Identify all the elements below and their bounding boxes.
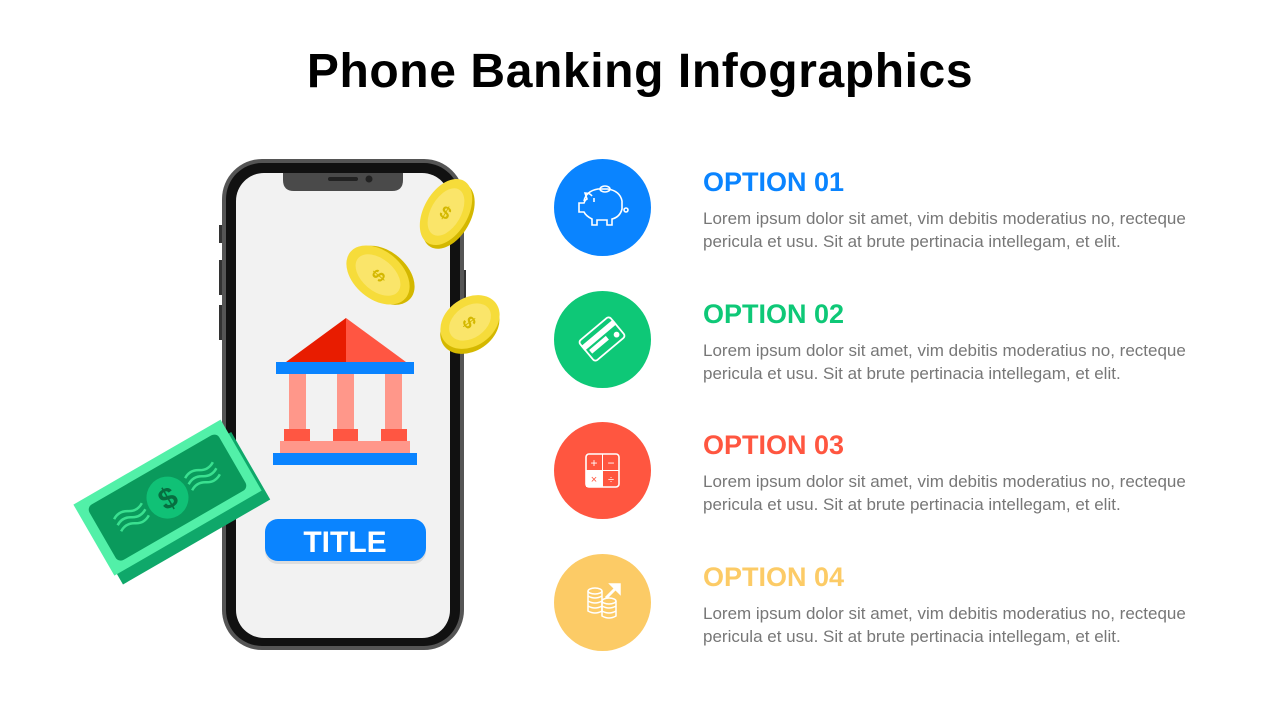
title button bbox=[265, 519, 426, 564]
title button: TITLE bbox=[303, 526, 387, 559]
option 04 text: pericula et usu. Sit at brute pertinacia intellegam, et elit. bbox=[703, 627, 1121, 646]
icon circle: calculator: − bbox=[607, 456, 615, 470]
coins: $ bbox=[458, 313, 480, 332]
icon circle: calculator: ÷ bbox=[608, 474, 614, 486]
option 02 text bbox=[703, 299, 1186, 383]
option 01 text: pericula et usu. Sit at brute pertinacia intellegam, et elit. bbox=[703, 232, 1121, 251]
icon circle: calculator: + bbox=[590, 456, 598, 470]
icon circle: credit card bbox=[554, 291, 651, 388]
option 03 text bbox=[703, 430, 1186, 514]
money bills: $ bbox=[153, 480, 184, 517]
title: Phone Banking Infographics bbox=[307, 45, 973, 98]
option 02 text: OPTION 02 bbox=[703, 299, 844, 329]
option 01 text bbox=[703, 167, 1186, 251]
icon circle: calculator: × bbox=[591, 474, 597, 486]
money bills bbox=[73, 418, 270, 586]
option 04 text: OPTION 04 bbox=[703, 562, 844, 592]
coins: $ bbox=[436, 202, 455, 224]
icon circle: piggy bank bbox=[554, 159, 651, 256]
coins: $ bbox=[368, 265, 390, 286]
option 02 text: pericula et usu. Sit at brute pertinacia intellegam, et elit. bbox=[703, 364, 1121, 383]
bank icon bbox=[273, 318, 417, 465]
icon circle: coins growth bbox=[554, 554, 651, 651]
option 01 text: Lorem ipsum dolor sit amet, vim debitis moderatius no, recteque bbox=[703, 209, 1186, 228]
icon circle: calculator bbox=[554, 422, 651, 519]
option 04 text: Lorem ipsum dolor sit amet, vim debitis moderatius no, recteque bbox=[703, 604, 1186, 623]
option 03 text: Lorem ipsum dolor sit amet, vim debitis moderatius no, recteque bbox=[703, 472, 1186, 491]
option 01 text: OPTION 01 bbox=[703, 167, 844, 197]
illustration: phone with bank, coins, money bbox=[73, 159, 500, 650]
option 02 text: Lorem ipsum dolor sit amet, vim debitis moderatius no, recteque bbox=[703, 341, 1186, 360]
option 03 text: OPTION 03 bbox=[703, 430, 844, 460]
phone body bbox=[219, 159, 466, 650]
coins bbox=[335, 170, 512, 365]
option 04 text bbox=[703, 562, 1186, 646]
option 03 text: pericula et usu. Sit at brute pertinacia intellegam, et elit. bbox=[703, 495, 1121, 514]
